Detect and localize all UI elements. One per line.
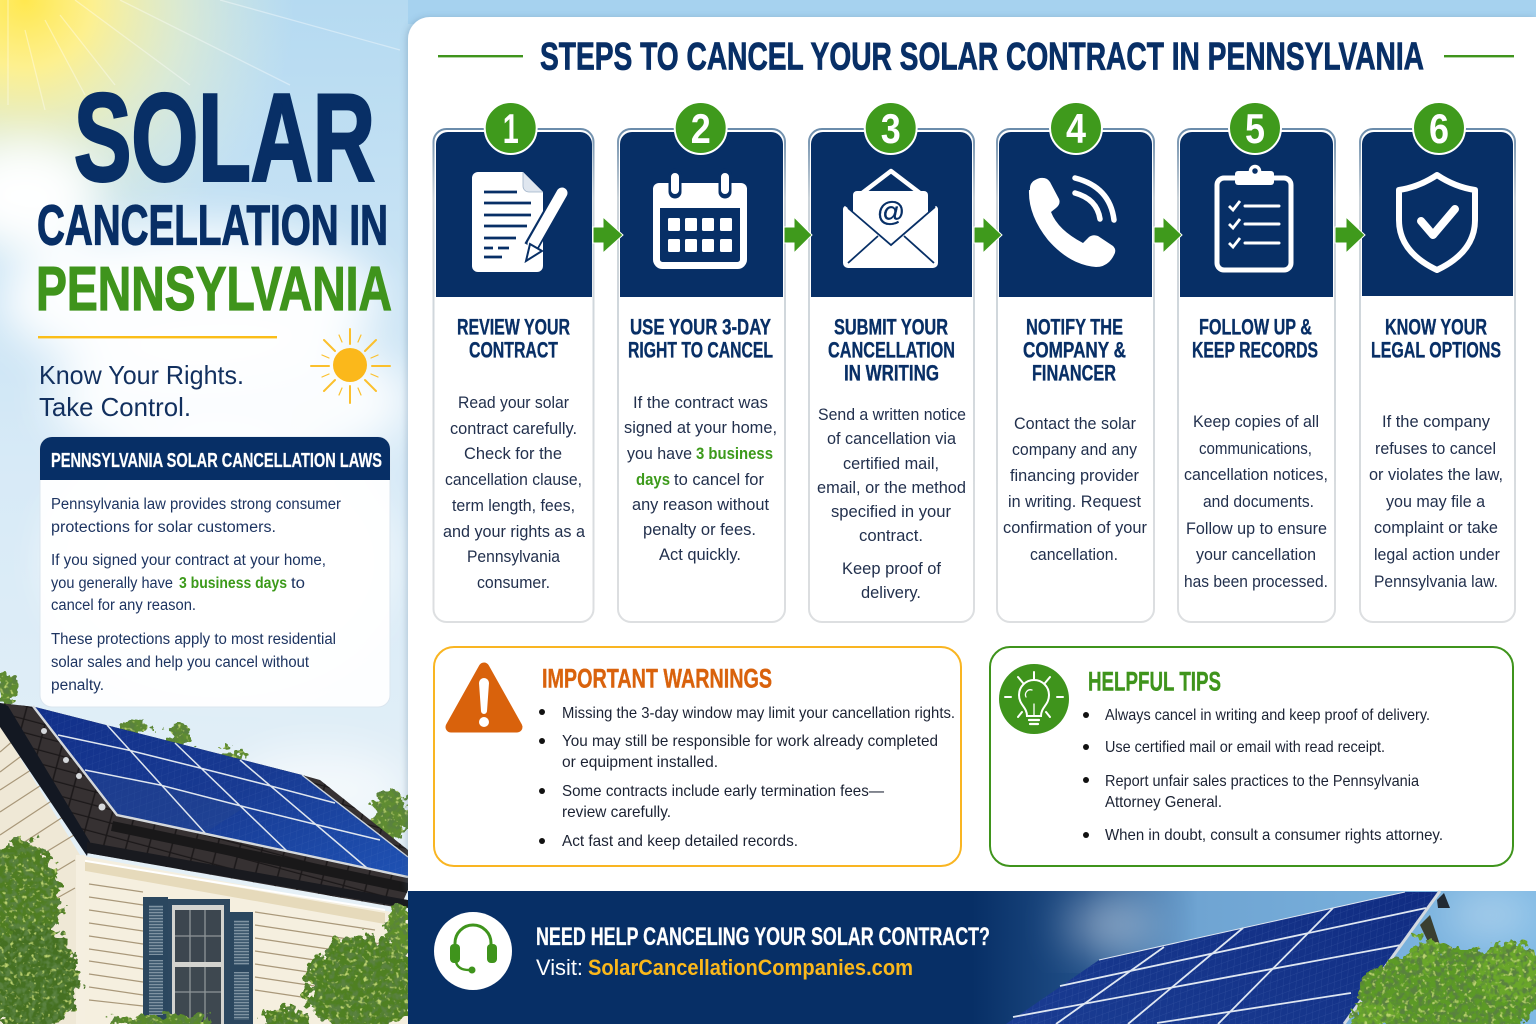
step 2 text: Act quickly. [659,546,741,564]
warnings list: review carefully. [562,804,671,821]
panel body text: 3 business days [179,575,287,592]
step 6 text: legal action under [1374,546,1500,564]
step 6 title [1371,314,1501,362]
panel body text: Pennsylvania law provides strong consumer [51,496,341,513]
step 3 title: IN WRITING [844,360,939,386]
step 5 text: cancellation notices, [1184,466,1328,484]
panel body text [51,496,341,694]
step 4 text [1003,415,1147,564]
warnings list: Some contracts include early termination fees— [562,783,884,800]
step 1 text [443,394,586,592]
panel heading: PENNSYLVANIA SOLAR CANCELLATION LAWS [51,450,382,472]
panel body text: cancel for any reason. [51,597,196,614]
step 2 text: penalty or fees. [643,521,756,539]
roof [0,703,408,908]
icon: shield with check [1399,175,1475,270]
panel: helpful tips [990,647,1513,866]
icon: envelope with at sign: @ [877,196,905,227]
panel body text: solar sales and help you cancel without [51,654,310,671]
step 3 text: certified mail, [843,455,939,473]
step number 5: 5 [1245,105,1265,152]
panel body text: to [291,575,305,592]
step 3 text: delivery. [861,584,921,602]
step 2 text: you have [627,445,692,463]
window and shutters [143,897,253,1024]
step 4 text: cancellation. [1030,546,1118,564]
step number 6: 6 [1429,105,1449,152]
step 4 title [1023,314,1126,386]
tagline: Take Control. [39,392,191,422]
step number 4 [1050,102,1102,154]
step 4 title: NOTIFY THE [1026,314,1123,340]
step number 5 [1229,102,1281,154]
step 3 text: Send a written notice [818,406,966,424]
call to action text [536,923,990,980]
banner clouds [1065,897,1535,951]
step 1 card [434,102,594,622]
panel body text: you generally have [51,575,173,592]
step 1 title [457,314,570,362]
step 4 title: COMPANY & [1023,338,1126,362]
step 6 text: Pennsylvania law. [1374,573,1498,591]
panel: Pennsylvania solar cancellation laws [40,437,390,707]
step number 4: 4 [1066,105,1087,152]
step 6 text: you may file a [1386,493,1486,511]
step 2 title: USE YOUR 3-DAY [630,314,771,340]
house wall [0,725,408,1024]
warnings list: You may still be responsible for work already completed [562,733,938,750]
step 6 text: refuses to cancel [1375,440,1496,458]
icon: warning triangle [451,668,517,727]
step 5 text: communications, [1199,440,1312,458]
call to action text: SolarCancellationCompanies.com [588,955,913,980]
step 4 card [997,102,1154,622]
tips list [1083,707,1443,844]
foreground bushes [0,838,418,1024]
step 2 card [618,102,785,622]
icon: document and pencil [472,172,562,272]
step 3 text: Keep proof of [842,560,941,578]
left title [36,70,392,324]
step number 3 [865,102,917,154]
step 5 text: Follow up to ensure [1186,520,1327,538]
step 5 title [1192,314,1318,362]
background trees [0,673,412,839]
step 1 text: Check for the [464,445,562,463]
call to action text: Visit: [536,955,583,980]
footer banner [408,891,1536,1024]
step 6 text: complaint or take [1374,519,1498,537]
step 6 text: If the company [1382,413,1491,431]
step 3 text: specified in your [831,503,952,521]
step 1 text: consumer. [477,574,550,592]
step 1 text: and your rights as a [443,523,586,541]
step 3 title: CANCELLATION [828,338,955,362]
step 4 title: FINANCER [1032,360,1116,386]
panel body text: penalty. [51,677,104,694]
step 2 text: days [636,471,670,489]
warnings list: Missing the 3-day window may limit your cancellation rights. [562,705,955,722]
panel body text: protections for solar customers. [51,519,276,536]
divider and sun icon [38,329,390,403]
step 1 text: Read your solar [458,394,569,412]
left title: SOLAR [74,70,375,208]
tagline: Know Your Rights. [39,360,244,390]
step 2 text: 3 business [696,445,773,463]
step 3 text: email, or the method [817,479,966,497]
tips list: Report unfair sales practices to the Pennsylvania [1105,773,1419,790]
tagline [39,360,244,422]
banner solar panel [1006,891,1450,1024]
step 5 title: KEEP RECORDS [1192,338,1318,362]
step 5 text: and documents. [1203,493,1314,511]
icon: light bulb [999,664,1069,734]
step 1 title: CONTRACT [469,338,558,362]
left title: CANCELLATION IN [37,194,388,258]
step 6 text: or violates the law, [1369,466,1503,484]
left title: PENNSYLVANIA [36,255,392,324]
step 2 text: any reason without [632,496,769,514]
house photo with solar panels [0,673,418,1024]
step number 2: 2 [691,105,711,152]
tips heading: HELPFUL TIPS [1088,666,1221,696]
step 5 title: FOLLOW UP & [1199,314,1312,340]
step number 1: 1 [503,105,519,152]
step 4 text: company and any [1012,441,1138,459]
step 3 title: SUBMIT YOUR [834,314,948,340]
step 3 card [809,102,974,622]
banner tree [1351,937,1536,1024]
rooftop solar panels [33,706,408,877]
step 1 text: term length, fees, [452,497,575,515]
step 4 text: financing provider [1010,467,1139,485]
step number 3: 3 [881,105,901,152]
step number 1 [485,102,537,154]
step 2 title [628,314,773,362]
warnings list: Act fast and keep detailed records. [562,833,798,850]
main white panel [408,17,1536,891]
step 1 text: cancellation clause, [445,471,582,489]
step 6 text [1369,413,1503,591]
step 1 text: Pennsylvania [467,548,561,566]
step 1 title: REVIEW YOUR [457,314,570,340]
warnings list [539,705,955,850]
step 6 title: KNOW YOUR [1385,314,1487,340]
tips list: Attorney General. [1105,794,1222,811]
step 2 text: If the contract was [633,394,768,412]
icon: envelope with at sign [843,171,938,268]
step 4 text: confirmation of your [1003,519,1147,537]
icon: calendar [653,175,747,266]
icon: clipboard checklist [1217,166,1291,270]
step 5 text: Keep copies of all [1193,413,1319,431]
panel: important warnings [434,647,961,866]
warnings heading: IMPORTANT WARNINGS [542,664,772,694]
step number 6 [1413,102,1465,154]
step 5 text [1184,413,1328,591]
step 3 text [817,406,966,602]
tips list: Always cancel in writing and keep proof of delivery. [1105,707,1430,724]
icon: phone [1029,178,1115,267]
warnings list: or equipment installed. [562,754,718,771]
step 5 text: has been processed. [1184,573,1328,591]
step 3 title [828,314,955,386]
step 3 text: contract. [859,527,923,545]
step 2 title: RIGHT TO CANCEL [628,338,773,362]
arrows between steps [593,217,1365,253]
panel header [40,437,390,480]
step 2 text: to cancel for [674,471,764,489]
tips list: When in doubt, consult a consumer rights attorney. [1105,827,1443,844]
step 4 text: in writing. Request [1008,493,1141,511]
panel body text: These protections apply to most residential [51,631,336,648]
step 3 text: of cancellation via [827,430,957,448]
step 4 text: Contact the solar [1014,415,1136,433]
step number 2 [675,102,727,154]
step 1 text: contract carefully. [450,420,577,438]
step 6 card [1360,102,1515,622]
step 5 text: your cancellation [1196,546,1316,564]
icon: headset [434,912,512,990]
call to action text: NEED HELP CANCELING YOUR SOLAR CONTRACT? [536,923,990,951]
step 2 text [624,394,777,564]
panel body text: If you signed your contract at your home, [51,552,326,569]
step 5 card [1178,102,1335,622]
tips list: Use certified mail or email with read receipt. [1105,739,1385,756]
step 2 text: signed at your home, [624,419,777,437]
